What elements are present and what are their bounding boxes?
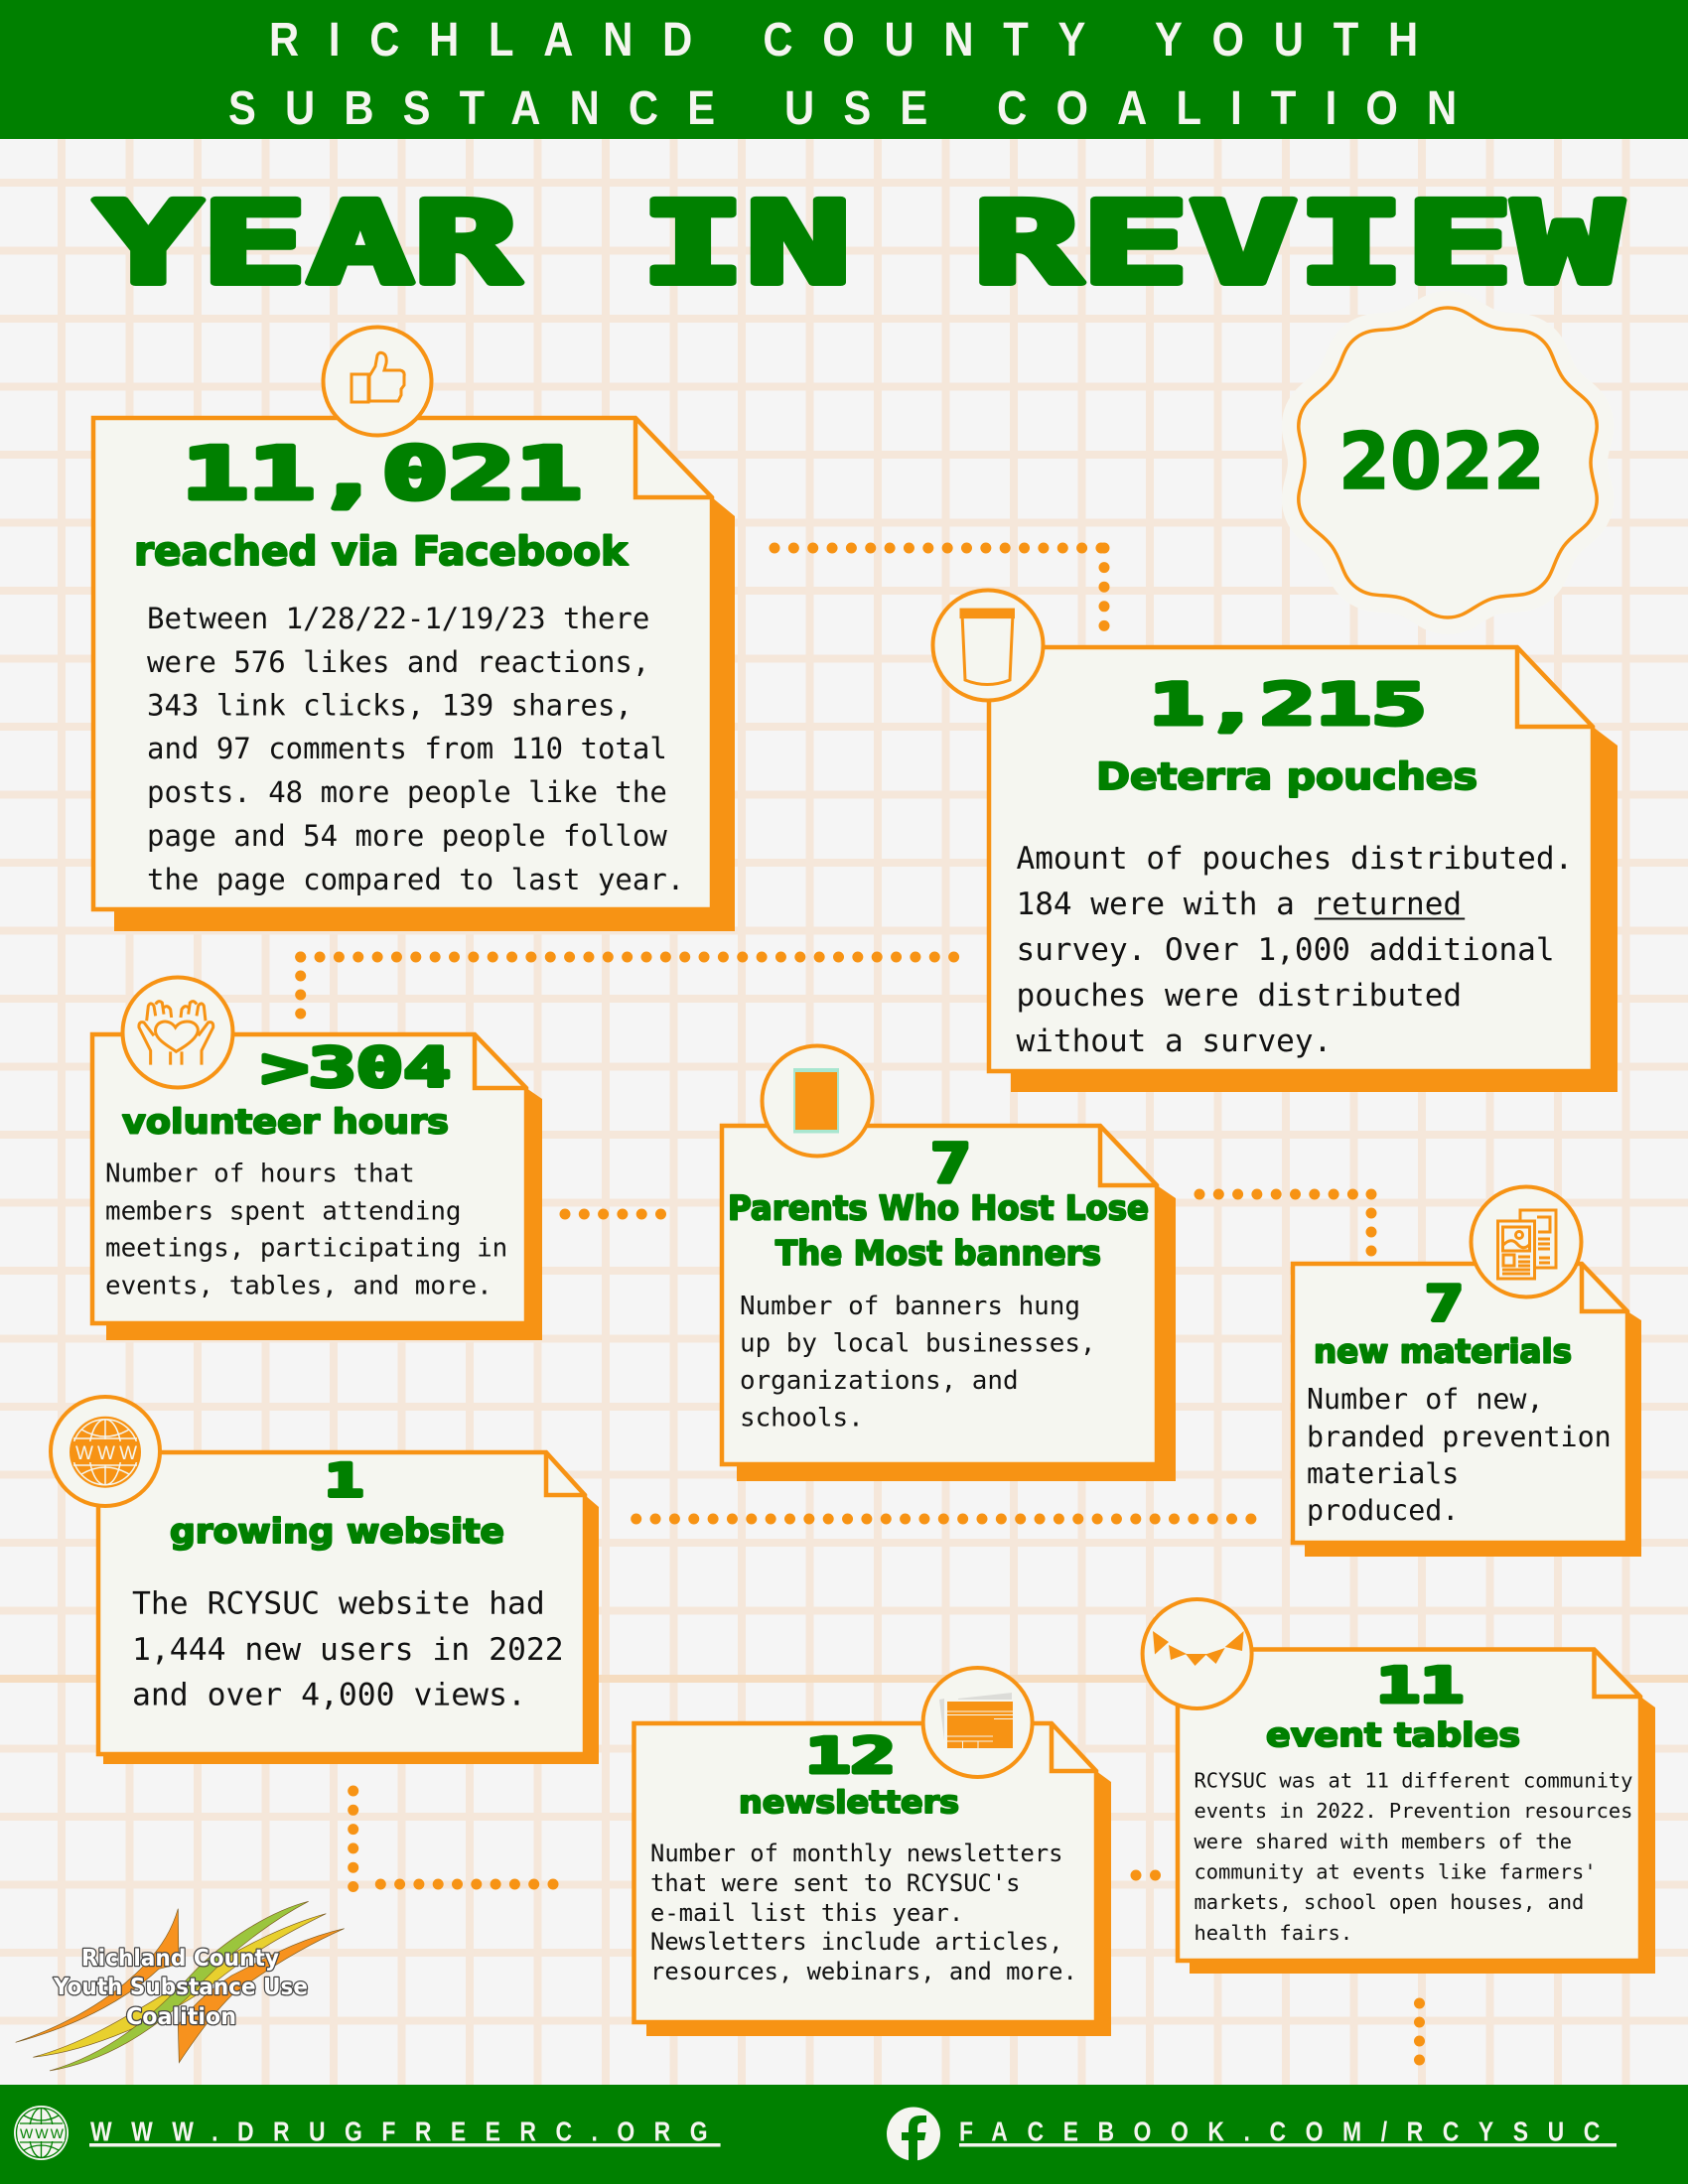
subheading: new materials: new materials [1314,1332,1572,1371]
body text: events in 2022. Prevention resources [1194,1799,1632,1823]
header banner [0,0,1688,139]
stat: >304: >304 [261,1036,451,1099]
stat: 1,215: 1,215 [1149,671,1427,739]
icon: pouch cup [933,590,1043,701]
body text: Number of new, [1307,1383,1544,1416]
dotted connector: down to Deterra [1098,548,1110,627]
title: Year in Review: IN [640,177,851,310]
stat: 7: 7 [1425,1276,1464,1332]
icon: newsletter [923,1668,1033,1777]
body text: without a survey. [1017,1024,1332,1059]
body text: produced. [1307,1494,1459,1527]
body text: were 576 likes and reactions, [147,645,649,679]
body text: Number of monthly newsletters [650,1840,1062,1867]
logo: Richland County Youth Substance Use Coalition: Coalition [126,2004,236,2030]
dotted connector: down to volunteer [295,957,306,1015]
logo: Richland County Youth Substance Use Coalition [16,1901,345,2071]
body text: 1,444 new users in 2022 [132,1632,564,1668]
body text: 343 link clicks, 139 shares, [147,689,633,723]
panel: new materials [1293,1187,1641,1557]
icon: www globe [51,1397,160,1506]
subheading: event tables: event tables [1266,1715,1520,1754]
Facebook address: FACEBOOK.COM/RCYSUC [959,2117,1600,2147]
subheading: Parents Who Host Lose The Most banners: The Most banners [775,1234,1101,1274]
body text: and 97 comments from 110 total [147,732,667,765]
body text: RCYSUC was at 11 different community [1194,1768,1632,1792]
body text: Between 1/28/22-1/19/23 there [147,602,649,635]
body text: and over 4,000 views. [132,1678,526,1713]
badge: 2022 [1299,308,1597,617]
icon: bunting [1143,1599,1252,1708]
logo: Richland County Youth Substance Use Coalition: Youth Substance Use [53,1975,308,2000]
stat: 1: 1 [325,1454,363,1507]
body text: Number of hours that [105,1160,415,1189]
dotted connector: newsletters to event tables [1136,1870,1156,1880]
subheading: Parents Who Host Lose The Most banners [728,1189,1149,1274]
title: Year in Review: REVIEW [973,177,1622,310]
body text: were shared with members of the [1194,1830,1572,1853]
panel: growing website [51,1397,599,1764]
body text: members spent attending [105,1197,462,1227]
title: Year in Review [95,177,1622,310]
dotted connector: down to materials [1366,1194,1376,1252]
body text: e-mail list this year. [650,1899,963,1927]
body text: schools. [740,1404,864,1433]
panel: Facebook reach [93,328,735,931]
body text: the page compared to last year. [147,863,684,896]
stat: 7: 7 [930,1133,971,1195]
heading line: Substance Use Coalition: SUBSTANCE USE COALITION [228,80,1457,135]
panel: Parents Who Host Lose The Most banners [722,1046,1176,1481]
icon: footer globe: WWW [20,2125,65,2141]
panel: volunteer hours [92,977,542,1340]
stat: 12: 12 [805,1727,896,1785]
dotted connector: Deterra to volunteer [301,951,955,963]
body text: organizations, and [740,1366,1019,1396]
body text: meetings, participating in [105,1234,507,1264]
subheading: volunteer hours: volunteer hours [122,1102,449,1142]
website address: WWW.DRUGFREERC.ORG [90,2117,708,2147]
icon: hands holding heart [123,977,232,1088]
stat: 11: 11 [1376,1658,1464,1713]
subheading: Parents Who Host Lose The Most banners: Parents Who Host Lose [728,1189,1149,1229]
body text: events, tables, and more. [105,1272,492,1301]
panel: Deterra pouches [933,590,1618,1092]
heading line: Richland County Youth: RICHLAND COUNTY YOUTH [269,12,1418,67]
body text: The RCYSUC website had [132,1586,545,1622]
subheading: growing website: growing website [170,1512,504,1552]
icon: www globe: WWW [75,1443,137,1464]
panel: newsletters [633,1668,1111,2036]
dotted connector: Facebook to Deterra [774,542,1104,554]
badge: 2022: 2022 [1338,418,1545,507]
dotted connector: below event tables [1414,2003,1425,2061]
body text: markets, school open houses, and [1194,1890,1584,1914]
body text: page and 54 more people follow [147,819,667,853]
body text: branded prevention [1307,1421,1612,1453]
logo: Richland County Youth Substance Use Coalition: Richland County [81,1946,279,1972]
footer band [0,2085,1688,2184]
dotted connector: volunteer to banners [565,1209,662,1219]
subheading: Deterra pouches: Deterra pouches [1096,755,1477,798]
body text: materials [1307,1457,1459,1490]
body text: up by local businesses, [740,1328,1096,1358]
body text: Number of banners hung [740,1292,1080,1321]
icon: banner [763,1046,872,1156]
subheading: reached via Facebook: reached via Facebook [134,529,629,575]
body text: resources, webinars, and more. [650,1958,1077,1985]
body text: health fairs. [1194,1921,1352,1945]
body text: survey. Over 1,000 additional [1017,932,1555,968]
dotted connector: materials to website [636,1513,1252,1525]
body text: Amount of pouches distributed. [1017,841,1573,877]
icon: Facebook [887,2107,940,2160]
body text: that were sent to RCYSUC's [650,1869,1021,1897]
title: Year in Review: YEAR [95,177,520,310]
body text: 184 were with a returned [1017,887,1462,922]
icon: thumbs up [324,328,431,435]
dotted connector: banners to materials [1199,1189,1371,1199]
body text: Newsletters include articles, [650,1928,1062,1956]
body text: community at events like farmers' [1194,1859,1597,1883]
body text: pouches were distributed [1017,978,1462,1014]
subheading: newsletters: newsletters [739,1785,959,1821]
icon: footer globe [14,2106,69,2160]
body text: posts. 48 more people like the [147,775,667,809]
panel: event tables [1143,1599,1655,1974]
icon: printed materials [1472,1187,1581,1297]
dotted connector: website down [348,1791,358,1889]
dotted connector: to newsletters [380,1878,555,1890]
stat: 11,021: 11,021 [182,432,582,515]
